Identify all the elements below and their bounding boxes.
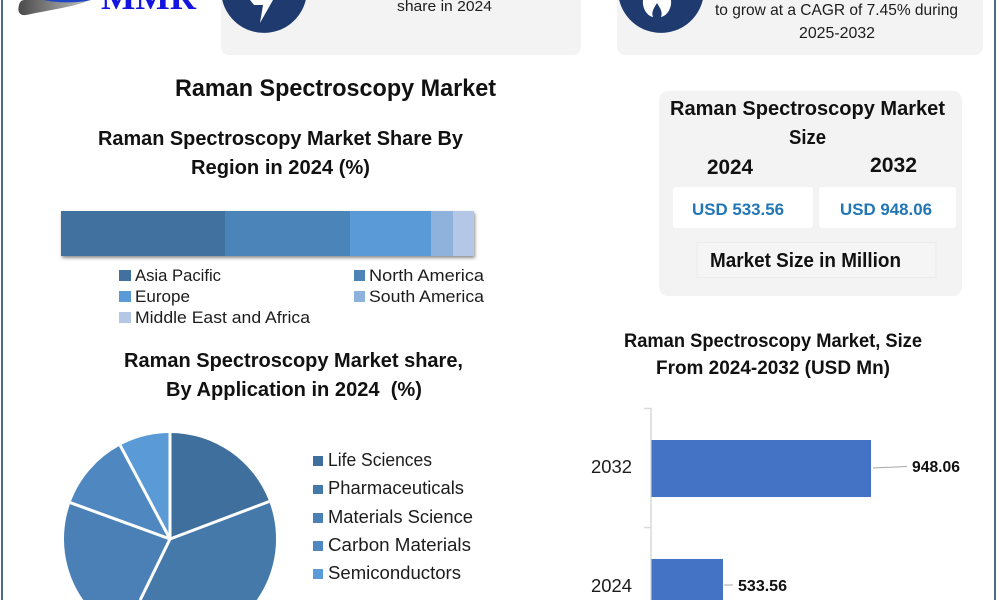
heading: share by region [98, 128, 464, 179]
value 2032 [819, 187, 956, 228]
stacked bar chart: region share [61, 211, 474, 256]
logo [18, 0, 197, 17]
legend: applications: Semiconductors [328, 563, 461, 583]
bar 2032 [591, 440, 960, 497]
unit note [697, 242, 936, 278]
legend: regions [119, 266, 485, 327]
title: Raman Spectroscopy Market [175, 75, 496, 102]
legend: applications: Life Sciences [328, 450, 432, 470]
panel: market share callout [221, 0, 581, 55]
legend: regions: Middle East and Africa [135, 308, 311, 327]
logo globe [44, 0, 91, 2]
bar 2024 [591, 559, 787, 600]
legend: regions: North America [369, 266, 485, 285]
heading: share by region: Region in 2024 (%) [191, 157, 370, 179]
legend: applications: Carbon Materials [328, 535, 471, 555]
bar 2024: 533.56 [738, 578, 787, 595]
callout text line 1: to grow at a CAGR of 7.45% during [715, 2, 958, 19]
callout text line 2: 2025-2032 [799, 25, 875, 42]
legend: applications: Materials Science [328, 507, 473, 527]
panel: market size [659, 91, 962, 296]
value 2024 [673, 187, 813, 228]
heading: market size chart: From 2024-2032 (USD Mn) [656, 358, 890, 379]
legend: regions: Asia Pacific [135, 266, 221, 285]
icon: lightning bolt [222, 0, 306, 33]
bar 2032: 2032 [591, 457, 632, 477]
pie chart: application share [64, 433, 276, 600]
legend: applications: Pharmaceuticals [328, 478, 464, 498]
year 2032: 2032 [870, 154, 917, 177]
bar 2032: 948.06 [912, 459, 960, 476]
icon: flame [619, 0, 703, 33]
bar 2024: 2024 [591, 576, 632, 596]
panel: CAGR callout [617, 0, 983, 55]
heading: share by application [124, 350, 463, 401]
logo swoosh [18, 0, 90, 15]
panel heading: Size [789, 127, 826, 149]
legend: applications [313, 450, 473, 583]
bar chart: market size [591, 408, 960, 600]
unit note: Market Size in Million [710, 250, 901, 272]
legend: regions: South America [369, 287, 485, 306]
legend: regions: Europe [135, 287, 190, 306]
heading: share by region: Raman Spectroscopy Market Share By [98, 128, 464, 150]
heading: market size chart: Raman Spectroscopy Market, Size [624, 331, 922, 352]
panel heading: Raman Spectroscopy Market [670, 98, 945, 120]
heading: share by application: Raman Spectroscopy Market share, [124, 350, 463, 372]
panel heading [670, 98, 945, 149]
year 2024: 2024 [707, 156, 753, 179]
heading: share by application: By Application in 2024 (%) [166, 379, 422, 401]
value 2024: USD 533.56 [692, 200, 784, 219]
heading: market size chart [624, 331, 922, 379]
value 2032: USD 948.06 [840, 200, 932, 219]
